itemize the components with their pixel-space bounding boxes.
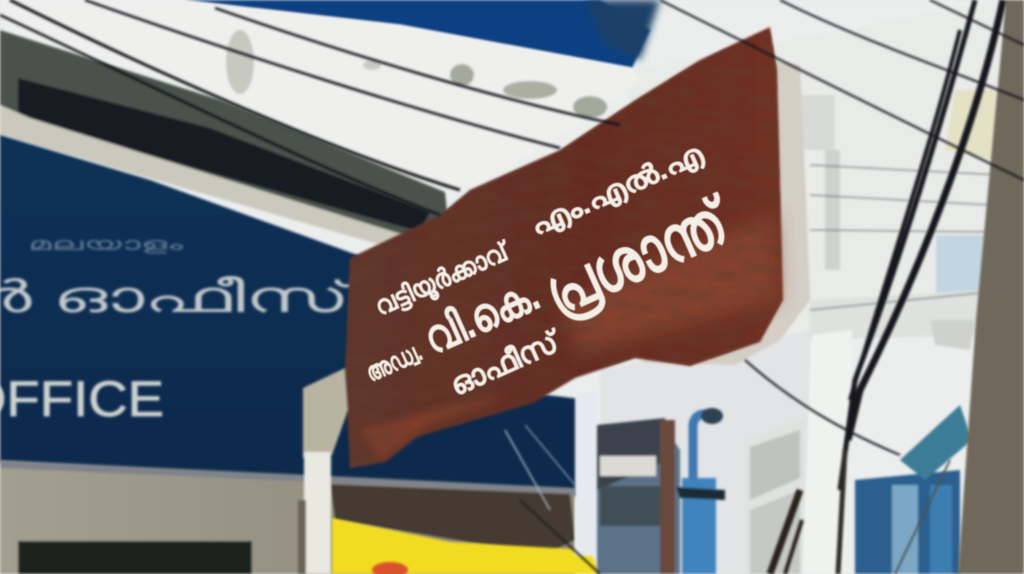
white sign post [298,368,348,574]
white awning [0,0,640,192]
board lettering: വി.കെ. [416,268,547,364]
board lettering [361,137,744,402]
board face [345,27,783,468]
foliage at top [585,0,660,60]
board lettering: പ്രശാന്ത് [534,183,744,330]
right building window [745,418,805,574]
board lettering: അഡ്വ. [361,336,426,387]
signboard lettering: മലയാളം [28,234,184,254]
blue office signboard [0,135,590,497]
board lettering: ഓഫീസ് [445,324,567,402]
sky [182,0,650,68]
white column by shop [575,392,597,556]
utility pole [958,0,1024,574]
signboard lettering [0,234,359,427]
roof eave [0,30,450,254]
concrete pillar [802,330,852,574]
wooden MLA name board [340,20,810,475]
wood grain lighter strip [560,215,778,355]
yellow banner [332,518,600,574]
distant electric pole and transformer [597,408,725,574]
lower wall and shop [0,460,575,574]
wood grain texture [340,20,790,475]
board lettering: എം.എൽ.എ [526,137,709,242]
blue water tanks [855,405,972,574]
board lettering: വട്ടിയൂർക്കാവ് [370,235,516,324]
board side edge [640,60,810,365]
